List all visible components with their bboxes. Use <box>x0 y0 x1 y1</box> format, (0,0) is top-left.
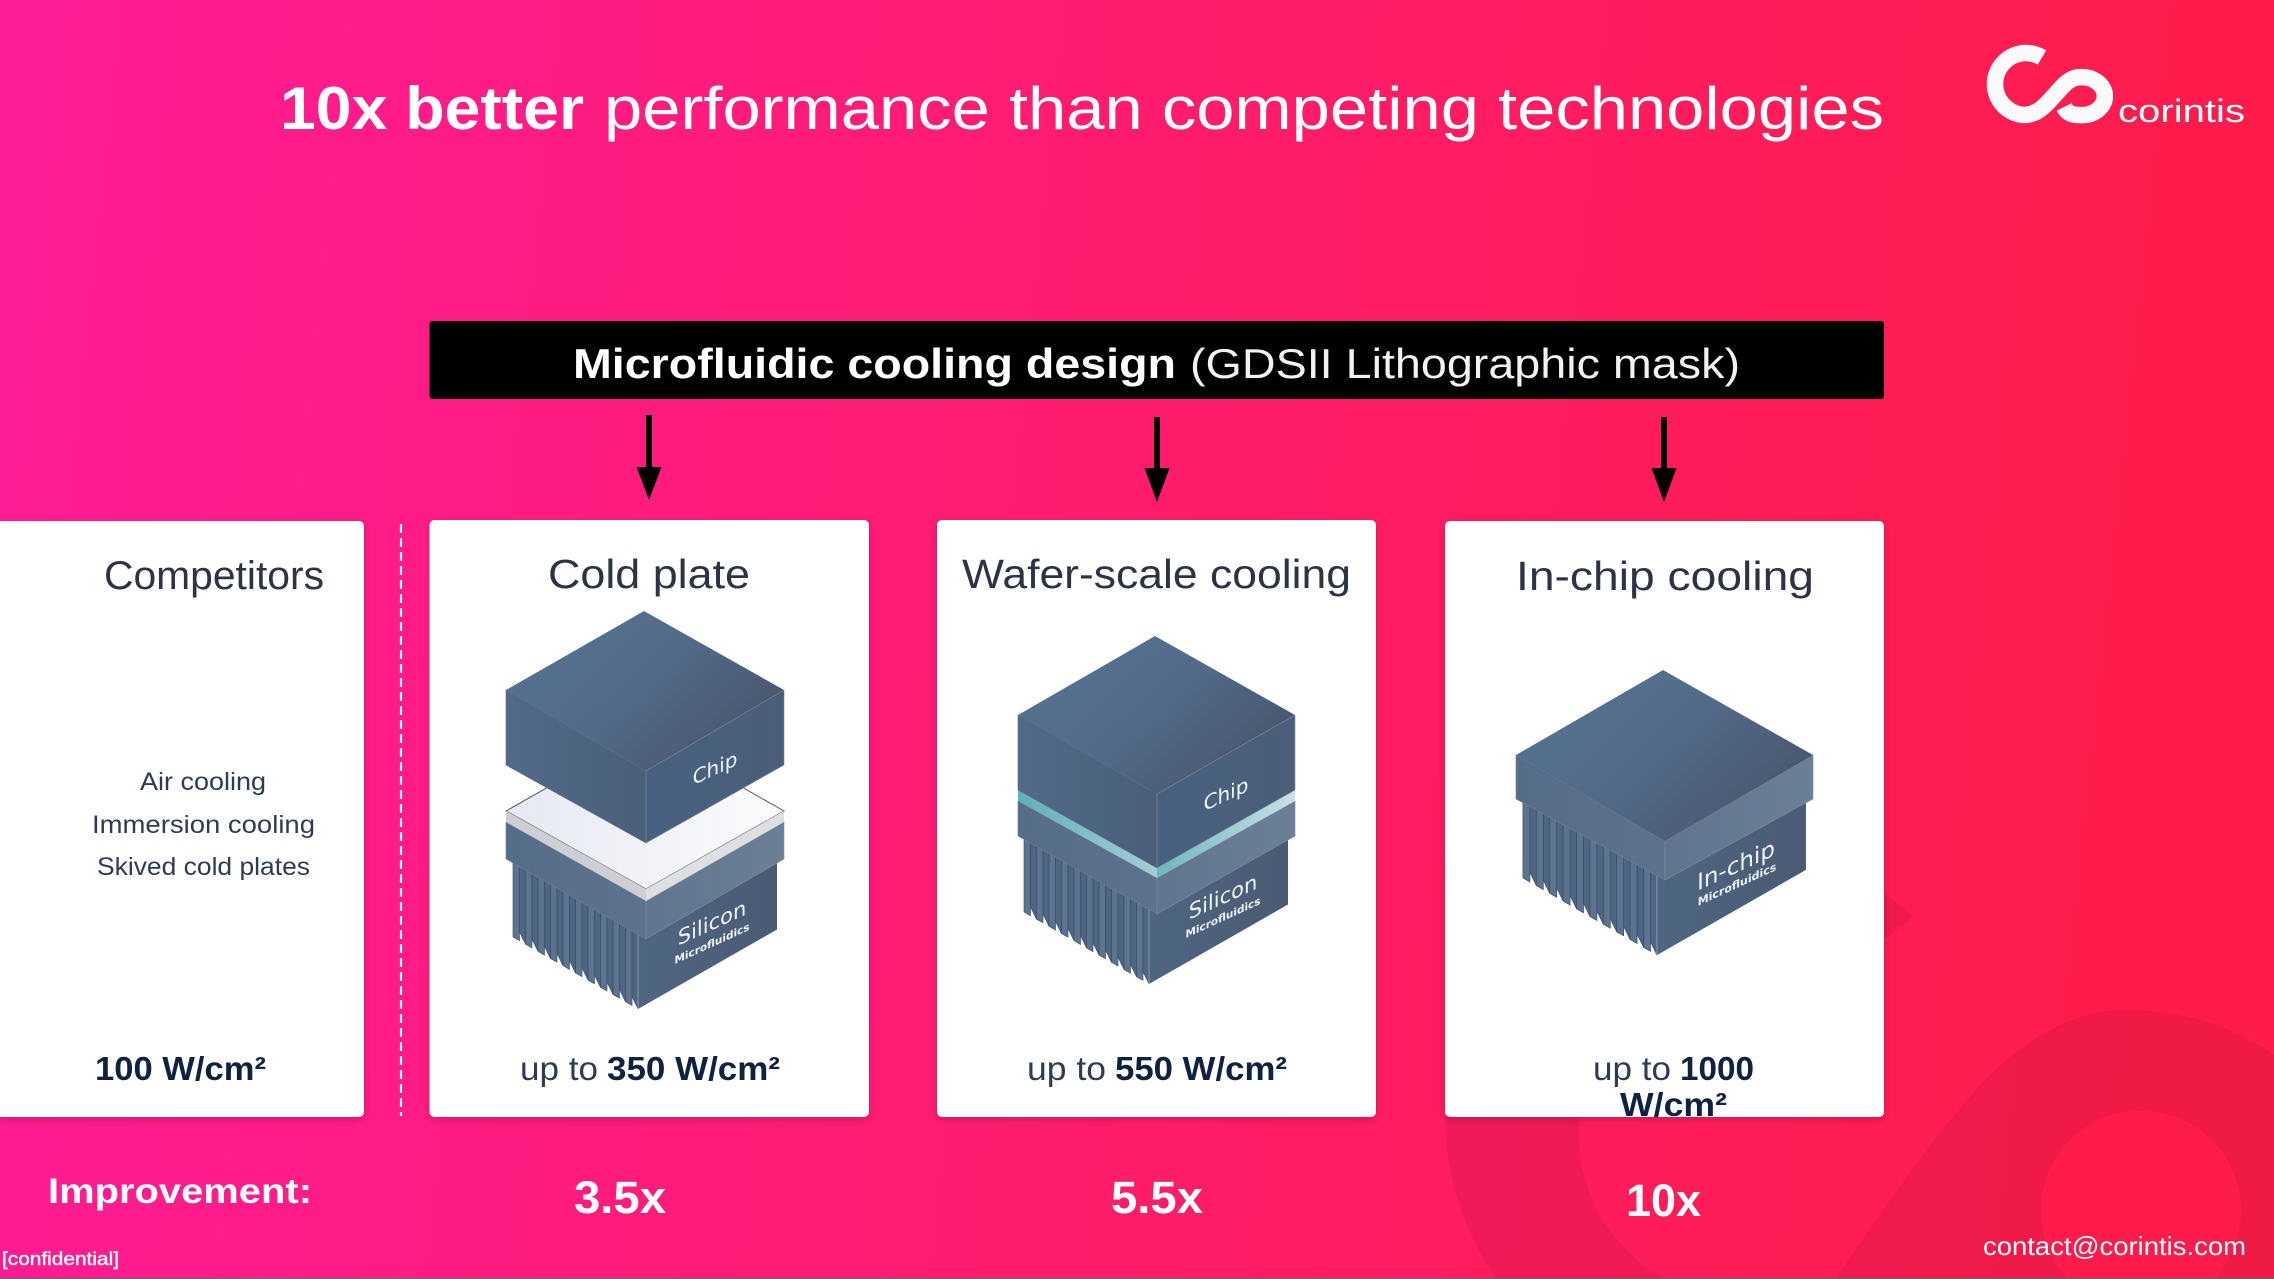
value: up to 1000 W/cm2: up to <box>1593 1050 1671 1087</box>
arrow: to cold plate <box>636 415 662 500</box>
title: 10x better <box>280 75 584 142</box>
arrow: to wafer-scale cooling <box>1144 417 1170 502</box>
logo: corintis <box>1995 53 2245 129</box>
panel: wafer-scale cooling <box>937 520 1376 1117</box>
label: in-chip: In-chip <box>1697 834 1775 897</box>
list of competing technologies: Air cooling <box>140 768 266 796</box>
list of competing technologies: Skived cold plates <box>97 853 310 881</box>
value: 10x: 10x <box>1626 1175 1701 1226</box>
label: chip: Chip <box>693 746 737 790</box>
value: up to 350 W/cm2: 350 W/cm² <box>607 1050 780 1087</box>
panel: in-chip cooling <box>1445 521 1884 1123</box>
illustration: chip, cold plate and silicon microfluidics stack <box>506 611 784 1009</box>
heading: in-chip cooling: In-chip cooling <box>1516 553 1814 599</box>
list of competing technologies <box>92 768 315 881</box>
divider: dashed separator <box>400 524 402 1116</box>
label: microfluidics: Microfluidics <box>674 920 750 967</box>
value: up to 550 W/cm2: up to <box>1027 1050 1106 1087</box>
value: up to 550 W/cm2: 550 W/cm² <box>1115 1050 1287 1087</box>
watermark: large corintis logo shape <box>1445 841 2274 1279</box>
panel: competitors <box>0 521 364 1117</box>
heading: cold plate: Cold plate <box>548 551 750 597</box>
heading: wafer-scale cooling: Wafer-scale cooling <box>962 551 1351 597</box>
label: silicon: Silicon <box>1189 870 1257 925</box>
value: 3.5x: 3.5x <box>574 1172 666 1223</box>
value: up to 550 W/cm2 <box>1027 1050 1287 1087</box>
logo wordmark: corintis <box>2118 93 2245 129</box>
illustration: chip bonded to silicon microfluidics <box>1018 636 1295 984</box>
value: 5.5x: 5.5x <box>1111 1172 1203 1223</box>
value: 100 W/cm2: 100 W/cm² <box>95 1050 266 1087</box>
title: performance than competing technologies <box>604 75 1884 142</box>
arrow: to in-chip cooling <box>1652 417 1676 502</box>
illustration: in-chip microfluidics <box>1516 670 1813 955</box>
value: up to 1000 W/cm2: W/cm² <box>1620 1086 1727 1123</box>
label: silicon: Silicon <box>678 896 746 951</box>
label: improvement: Improvement: <box>48 1172 312 1211</box>
heading: competitors: Competitors <box>104 554 324 598</box>
icon: infinity C mark <box>1995 53 2105 115</box>
panel: cold plate <box>430 520 869 1117</box>
value: up to 350 W/cm2 <box>520 1050 780 1087</box>
label: microfluidics: Microfluidics <box>1185 894 1261 941</box>
label: chip: Chip <box>1204 772 1248 816</box>
banner: microfluidic cooling design <box>430 321 1884 399</box>
title <box>280 75 1884 142</box>
list of competing technologies: Immersion cooling <box>92 811 315 839</box>
contact email: contact@corintis.com <box>1983 1231 2246 1261</box>
confidential note: [confidential] <box>2 1249 119 1269</box>
value: up to 1000 W/cm2: 1000 <box>1680 1050 1754 1087</box>
value: up to 350 W/cm2: up to <box>520 1050 598 1087</box>
banner: microfluidic cooling design: (GDSII Lithographic mask) <box>1190 340 1740 387</box>
value: up to 1000 W/cm2 <box>1593 1050 1754 1123</box>
label: microfluidics: Microfluidics <box>1698 859 1776 909</box>
banner: microfluidic cooling design: Microfluidic cooling design <box>573 340 1176 387</box>
